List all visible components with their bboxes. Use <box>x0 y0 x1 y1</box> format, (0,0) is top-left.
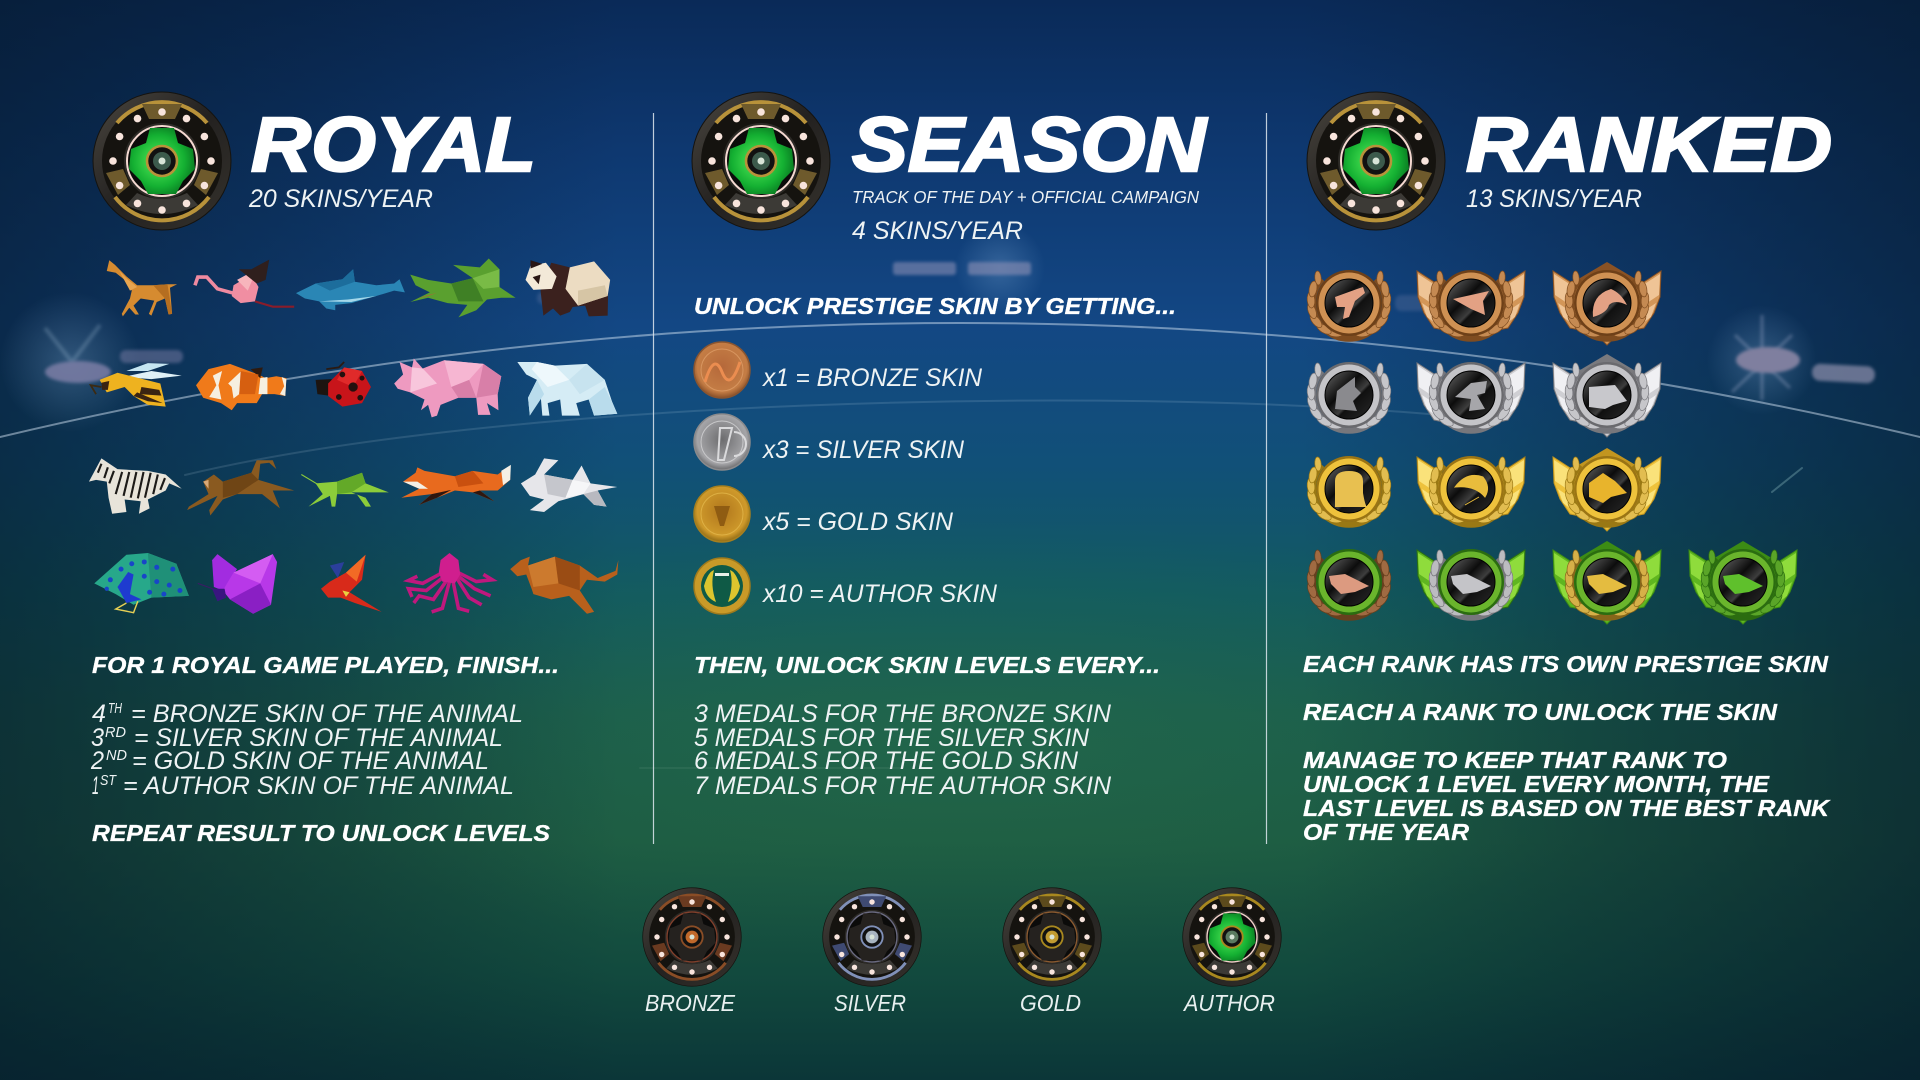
legend item: bronze: BRONZE <box>645 990 736 1016</box>
ranked title: RANKED <box>1466 102 1832 188</box>
royal instructions: = SILVER SKIN OF THE ANIMAL <box>134 724 503 752</box>
season instructions: THEN, UNLOCK SKIN LEVELS EVERY... <box>694 652 1160 678</box>
animals grid <box>89 258 618 614</box>
animal: bee <box>91 363 182 407</box>
ranked instructions: MANAGE TO KEEP THAT RANK TO <box>1303 747 1727 773</box>
medal: silver <box>694 414 750 470</box>
season title: SEASON <box>852 102 1208 188</box>
season instructions: 7 MEDALS FOR THE AUTHOR SKIN <box>694 772 1112 800</box>
animal: panda <box>526 260 610 316</box>
badge: green bronze laurel <box>1306 549 1392 618</box>
badge: silver shield <box>1553 354 1661 437</box>
royal skins per year: 20 SKINS/YEAR <box>248 185 433 213</box>
season prestige heading: UNLOCK PRESTIGE SKIN BY GETTING... <box>694 293 1176 319</box>
legend item: author <box>1182 888 1281 1016</box>
animal: giraffe <box>107 260 177 316</box>
medal text: silver: x3 = SILVER SKIN <box>762 436 965 464</box>
medal list <box>694 342 998 614</box>
medal text: bronze: x1 = BRONZE SKIN <box>762 364 983 392</box>
royal instructions: 3 <box>91 724 104 752</box>
animal: kangaroo <box>510 557 618 614</box>
ranked wheel icon <box>1307 92 1445 230</box>
royal instructions: = AUTHOR SKIN OF THE ANIMAL <box>123 772 514 800</box>
season source: TRACK OF THE DAY + OFFICIAL CAMPAIGN <box>852 187 1199 207</box>
ranked instructions: OF THE YEAR <box>1303 819 1469 845</box>
animal: zebra <box>89 458 182 514</box>
animal: flamingo <box>195 260 294 307</box>
royal instructions: ND <box>106 747 127 764</box>
legend: wheel tiers <box>643 888 1281 1016</box>
animal: dolphin <box>296 269 405 310</box>
animal: grasshopper <box>301 473 389 507</box>
animal: peacock <box>94 553 189 613</box>
season skins per year: 4 SKINS/YEAR <box>852 217 1023 245</box>
divider: royal and season <box>652 113 654 844</box>
panel: season <box>692 92 1208 800</box>
royal instructions: RD <box>105 724 126 741</box>
medal: gold <box>694 486 750 542</box>
season wheel icon <box>692 92 830 230</box>
royal instructions: 2 <box>90 747 104 775</box>
royal instructions: ST <box>100 772 118 789</box>
ranked skins per year: 13 SKINS/YEAR <box>1466 185 1642 213</box>
badge: green gold shield <box>1553 541 1661 624</box>
badge: bronze laurel <box>1306 270 1392 339</box>
badge: bronze shield <box>1553 262 1661 345</box>
ranked instructions: EACH RANK HAS ITS OWN PRESTIGE SKIN <box>1303 651 1828 677</box>
badge: gold laurel <box>1306 456 1392 525</box>
animal: butterfly <box>198 554 277 614</box>
badge: gold shield <box>1553 448 1661 531</box>
badge: silver laurel <box>1306 362 1392 431</box>
ranked instructions: UNLOCK 1 LEVEL EVERY MONTH, THE <box>1303 771 1770 797</box>
royal instructions <box>90 652 559 846</box>
royal instructions: FOR 1 ROYAL GAME PLAYED, FINISH... <box>92 652 559 678</box>
animal: rabbit <box>521 458 617 512</box>
animal: pig <box>394 358 501 417</box>
panel: ranked <box>1303 92 1832 845</box>
season instructions: 6 MEDALS FOR THE GOLD SKIN <box>694 747 1079 775</box>
legend item: gold <box>1003 888 1101 1016</box>
medal: bronze <box>694 342 750 398</box>
badge: bronze wings <box>1417 270 1525 339</box>
legend item: bronze <box>643 888 741 1016</box>
royal title: ROYAL <box>251 102 536 188</box>
animal: monkey <box>187 460 294 516</box>
ranked instructions: LAST LEVEL IS BASED ON THE BEST RANK <box>1303 795 1830 821</box>
legend item: author: AUTHOR <box>1182 990 1275 1016</box>
royal instructions: 1 <box>92 772 99 800</box>
royal instructions: 4 <box>92 700 106 728</box>
legend item: gold: GOLD <box>1020 990 1081 1016</box>
royal instructions: TH <box>108 700 122 717</box>
badge: silver wings <box>1417 362 1525 431</box>
ranked instructions: REACH A RANK TO UNLOCK THE SKIN <box>1303 699 1777 725</box>
season instructions: 3 MEDALS FOR THE BRONZE SKIN <box>694 700 1112 728</box>
ranked instructions <box>1303 651 1830 845</box>
badge: gold wings <box>1417 456 1525 525</box>
badge: green silver wings <box>1417 549 1525 618</box>
medal: author <box>694 558 750 614</box>
panel: royal <box>89 92 618 846</box>
legend item: silver <box>823 888 921 1016</box>
royal instructions: REPEAT RESULT TO UNLOCK LEVELS <box>92 820 551 846</box>
season instructions <box>694 652 1160 800</box>
animal: crocodile <box>410 258 516 317</box>
animal: octopus <box>408 553 492 612</box>
royal instructions: = GOLD SKIN OF THE ANIMAL <box>132 747 489 775</box>
rank badges grid <box>1306 262 1797 624</box>
royal wheel icon <box>93 92 231 230</box>
animal: clownfish <box>196 364 286 410</box>
divider: season and ranked <box>1266 113 1268 844</box>
legend item: silver: SILVER <box>834 990 906 1016</box>
medal text: gold: x5 = GOLD SKIN <box>762 508 954 536</box>
season instructions: 5 MEDALS FOR THE SILVER SKIN <box>694 724 1090 752</box>
animal: ladybug <box>316 362 371 407</box>
royal instructions: = BRONZE SKIN OF THE ANIMAL <box>131 700 523 728</box>
medal text: author: x10 = AUTHOR SKIN <box>762 580 998 608</box>
animal: fox <box>401 465 511 505</box>
badge: green author shield <box>1689 541 1797 624</box>
animal: parrot <box>321 555 382 612</box>
animal: polar bear <box>517 362 617 416</box>
